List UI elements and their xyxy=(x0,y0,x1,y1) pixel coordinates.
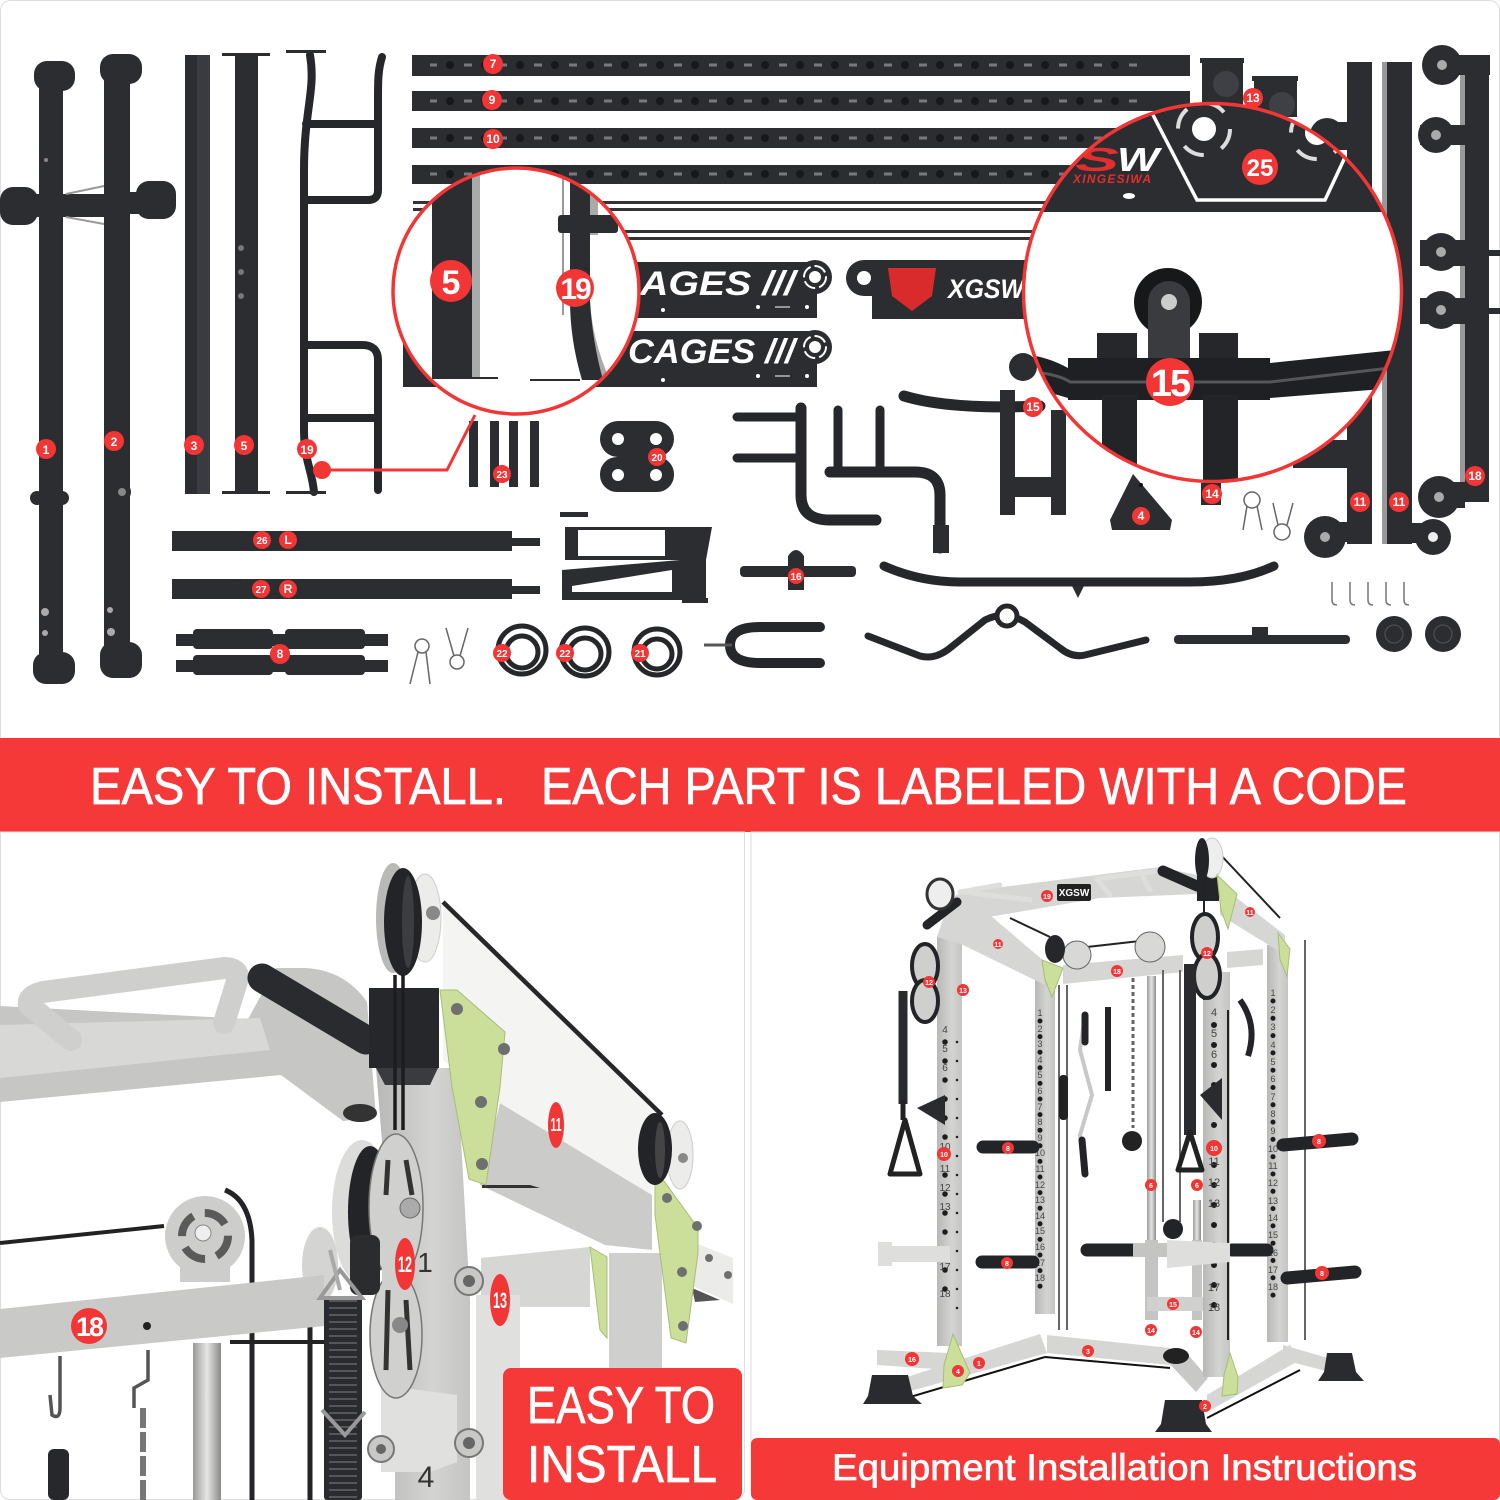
tricep rope xyxy=(704,627,820,663)
green gusset plates xyxy=(440,990,732,1343)
numbered hole rows: 13 xyxy=(1268,1196,1278,1206)
numbered hole rows: 14 xyxy=(1268,1213,1278,1223)
front uprights xyxy=(937,937,1230,1377)
front uprights: 5 xyxy=(942,1044,948,1055)
parts 26 and 27: arms: L xyxy=(284,533,292,547)
double pulley xyxy=(332,1134,423,1398)
part 13 tag: 13 xyxy=(493,1288,507,1313)
numbered hole rows: 14 xyxy=(1035,1211,1045,1221)
long numbered beams 7, 9, 10 xyxy=(412,54,1190,184)
numbered hole rows: 4 xyxy=(1037,1055,1043,1065)
red number tags: 13 xyxy=(959,988,967,995)
diagonal brace, part 11: 11 xyxy=(550,1115,562,1135)
hanging attachments xyxy=(1059,978,1142,1174)
part 4: triangle plate: 4 xyxy=(1138,509,1145,523)
black grip xyxy=(262,978,366,1040)
red number tags: 14 xyxy=(1192,1330,1200,1337)
cross bar with plates xyxy=(0,181,176,225)
top plate 25 xyxy=(1044,105,1382,212)
center rods and lat bar part 15 xyxy=(1087,976,1203,1320)
front uprights: 5 xyxy=(1211,1028,1217,1040)
numbered hole rows: 1 xyxy=(1270,988,1276,998)
front uprights: 13 xyxy=(939,1202,951,1213)
numbered hole rows: 12 xyxy=(1268,1178,1278,1188)
parts 22, 22, 21: cables: 21 xyxy=(634,649,646,660)
red number tags: 8 xyxy=(1006,1146,1010,1153)
panel: close-up of pulley corner xyxy=(0,832,744,1500)
top plate 25: XINGESIWA xyxy=(1072,172,1151,186)
part 15: lat frame: 15 xyxy=(1026,400,1040,414)
red number tags: 11 xyxy=(994,942,1002,949)
part 12 tag: 12 xyxy=(398,1252,412,1277)
numbered hole rows: 16 xyxy=(1035,1242,1045,1252)
numbered hole rows: 8 xyxy=(1037,1117,1043,1127)
numbered hole rows: 6 xyxy=(1037,1086,1043,1096)
base xyxy=(863,1334,1364,1432)
top frame: XGSW xyxy=(1059,888,1090,899)
part 16: short bar xyxy=(740,550,856,590)
long numbered beams 7, 9, 10: 10 xyxy=(486,132,500,146)
red number tags: 12 xyxy=(925,980,933,987)
numbered hole rows: 11 xyxy=(1035,1164,1045,1174)
plate with lion logo: XGSW xyxy=(946,274,1026,304)
curl bar xyxy=(868,606,1146,657)
part 14 xyxy=(1201,483,1222,505)
part 8: sleeves: 8 xyxy=(277,647,284,661)
red number tags: 8 xyxy=(1005,1261,1009,1268)
top frame xyxy=(927,851,1285,985)
red number tags: 10 xyxy=(1210,1146,1218,1153)
numbered hole rows: 12 xyxy=(1035,1180,1045,1190)
front uprights: 11 xyxy=(940,1164,951,1175)
magnifier: parts 5 and 19 xyxy=(393,165,639,414)
red number tags: 8 xyxy=(1320,1271,1324,1278)
front uprights: 4 xyxy=(1211,1007,1217,1019)
lat bar with pulley, part 15 xyxy=(1030,268,1395,485)
rear frame and cross bar 18 xyxy=(1010,918,1288,1342)
plate with lion logo xyxy=(846,260,1030,319)
numbered hole rows: 10 xyxy=(1268,1144,1278,1154)
top plate 25: S xyxy=(1075,141,1119,178)
part 12 tag: 1 xyxy=(417,1247,433,1278)
numbered hole rows: 16 xyxy=(1268,1248,1278,1258)
numbered hole rows: 5 xyxy=(1270,1057,1276,1067)
numbered hole rows: 4 xyxy=(1270,1040,1276,1050)
front uprights: 12 xyxy=(1208,1177,1220,1189)
top pulleys xyxy=(927,838,1223,1000)
magnifier: parts 25 and 15: 25 xyxy=(1247,155,1273,182)
numbered hole rows: 2 xyxy=(1270,1005,1276,1015)
numbered hole rows: 3 xyxy=(1037,1039,1043,1049)
numbered hole rows: 8 xyxy=(1270,1109,1276,1119)
part 19: ladder frame: 19 xyxy=(300,443,314,457)
banner: easy to install: EACH PART IS LABELED WITH A CODE xyxy=(541,758,1407,816)
magnifier: parts 25 and 15: 15 xyxy=(1151,363,1191,405)
front uprights: 17 xyxy=(1208,1282,1220,1294)
part 19: ladder frame xyxy=(286,50,382,494)
red number tags: 14 xyxy=(1147,1328,1155,1335)
parts 26 and 27: arms: R xyxy=(284,582,293,596)
parts 26 and 27: arms: 26 xyxy=(256,536,268,547)
front uprights: 12 xyxy=(939,1183,951,1194)
red number tags: 3 xyxy=(1086,1349,1090,1356)
numbered hole rows: 9 xyxy=(1037,1133,1043,1143)
numbered hole rows: 7 xyxy=(1037,1102,1043,1112)
part 4: triangle plate xyxy=(1110,474,1172,530)
red number tags: 10 xyxy=(940,1152,948,1159)
branded plates: CAGES /// xyxy=(628,333,799,371)
crossbar, part 18 xyxy=(0,1275,324,1358)
numbered hole rows: 9 xyxy=(1270,1126,1276,1136)
upright post xyxy=(368,988,520,1500)
sleeves xyxy=(982,1139,1355,1278)
callout: easy to install: EASY TO xyxy=(527,1377,715,1435)
numbered hole rows: 2 xyxy=(1037,1024,1043,1034)
long numbered beams 7, 9, 10: 9 xyxy=(489,93,496,107)
crossbar cables and middle pulley xyxy=(0,1190,338,1500)
red number tags: 2 xyxy=(1203,1404,1207,1411)
front uprights: 4 xyxy=(942,1025,948,1036)
rear horizontal and second upright xyxy=(481,1230,733,1500)
red number tags: 8 xyxy=(1317,1139,1321,1146)
J-cup arms xyxy=(878,1240,1230,1268)
part 20: linked plates: 20 xyxy=(651,453,663,464)
parts 22, 22, 21: cables xyxy=(493,626,680,676)
red number tags: 19 xyxy=(1043,894,1051,901)
red number tags: 15 xyxy=(1169,1302,1177,1309)
safety brackets xyxy=(560,512,712,603)
foam rolls xyxy=(1376,616,1461,652)
hanging hook, chain and rod xyxy=(48,1343,221,1500)
numbered hole rows xyxy=(1035,940,1305,1340)
callout: easy to install: INSTALL xyxy=(527,1436,717,1494)
numbered hole rows: 15 xyxy=(1035,1226,1045,1236)
numbered hole rows: 6 xyxy=(1270,1074,1276,1084)
diagonal brace, part 11 xyxy=(443,902,662,1250)
part 5: beam: 5 xyxy=(241,439,248,453)
part 2: upright post: 2 xyxy=(111,435,118,449)
front uprights: 11 xyxy=(1208,1156,1220,1168)
parts 26 and 27: arms: 27 xyxy=(255,585,267,596)
part 15: lat frame xyxy=(904,353,1066,515)
part 8: sleeves xyxy=(176,629,388,675)
curved top tube xyxy=(0,968,377,1122)
banner: easy to install xyxy=(0,738,1500,832)
J hooks and handles xyxy=(737,408,949,553)
magnifier: parts 5 and 19: 19 xyxy=(560,273,591,306)
top pulley and cable xyxy=(376,863,662,1130)
side double pulleys, straps and handles xyxy=(890,914,1252,1174)
red number tags: 12 xyxy=(1203,951,1211,958)
numbered hole rows: 15 xyxy=(1268,1230,1278,1240)
right posts 11 and 18: 11 xyxy=(1393,495,1406,509)
numbered hole rows: 3 xyxy=(1270,1022,1276,1032)
right posts 11 and 18 xyxy=(1293,45,1500,558)
spring clips xyxy=(410,628,468,684)
right posts 11 and 18: 11 xyxy=(1354,495,1367,509)
numbered hole rows: 17 xyxy=(1035,1258,1045,1268)
long curved bar xyxy=(884,566,1274,598)
magnifier: parts 5 and 19: 5 xyxy=(442,264,460,302)
numbered hole rows: 7 xyxy=(1270,1092,1276,1102)
magnifier: parts 25 and 15 xyxy=(1020,100,1410,485)
right posts 11 and 18: 18 xyxy=(1468,469,1482,483)
part 23: sleeves: 23 xyxy=(496,470,508,481)
hooks xyxy=(1332,582,1409,605)
panel: assembled power rack xyxy=(751,832,1500,1500)
long numbered beams 7, 9, 10: 7 xyxy=(490,57,497,71)
numbered hole rows: 13 xyxy=(1035,1195,1045,1205)
part 5: beam xyxy=(222,53,270,494)
part 20: linked plates xyxy=(600,421,674,492)
pull-up handle xyxy=(29,968,238,1040)
part 16: short bar: 16 xyxy=(790,572,802,583)
parts 22, 22, 21: cables: 22 xyxy=(496,649,508,660)
part 13 tag xyxy=(490,1274,510,1326)
red number tags: 16 xyxy=(908,1357,916,1364)
branded plates xyxy=(403,260,832,387)
part 1: upright post: 1 xyxy=(43,443,50,457)
front uprights: 17 xyxy=(939,1262,951,1273)
numbered hole rows: 10 xyxy=(1035,1148,1045,1158)
numbered hole rows: 1 xyxy=(1037,1008,1043,1018)
right pulley xyxy=(638,1113,693,1189)
part 23: sleeves xyxy=(469,421,539,487)
crossbar, part 18: 18 xyxy=(76,1312,104,1342)
front uprights: 10 xyxy=(939,1142,951,1153)
part 14: 14 xyxy=(1205,487,1219,501)
part 1: upright post xyxy=(30,61,75,684)
red number tags xyxy=(905,890,1329,1412)
branded plates: AGES /// xyxy=(639,265,799,303)
red number tags: 4 xyxy=(956,1369,960,1376)
panel: parts layout xyxy=(0,0,1500,760)
numbered hole rows: 17 xyxy=(1268,1265,1278,1275)
front uprights: 18 xyxy=(939,1289,951,1300)
connector line xyxy=(313,415,475,479)
red number tags: 6 xyxy=(1149,1183,1153,1190)
part 3: beam xyxy=(184,55,210,494)
strap xyxy=(320,1250,365,1500)
part 13: pulley brackets: 13 xyxy=(1246,91,1260,105)
guide rods xyxy=(413,201,1053,240)
spring clips xyxy=(1243,492,1293,540)
part 13: pulley brackets xyxy=(1200,58,1298,118)
part 12 tag: 4 xyxy=(418,1461,434,1494)
numbered hole rows: 5 xyxy=(1037,1070,1043,1080)
red number tags: 1 xyxy=(977,1361,981,1368)
front uprights: 18 xyxy=(1208,1302,1220,1314)
part 12 tag xyxy=(395,1238,434,1494)
front uprights: 13 xyxy=(1208,1198,1220,1210)
green gussets xyxy=(943,875,1290,1396)
front uprights: 6 xyxy=(1211,1049,1217,1061)
part 2: upright post xyxy=(100,54,142,678)
part 3: beam: 3 xyxy=(191,439,198,453)
red number tags: 18 xyxy=(1113,969,1121,976)
red number tags: 11 xyxy=(1246,910,1254,917)
straight handle xyxy=(1174,627,1350,644)
red number tags: 6 xyxy=(1195,1183,1199,1190)
top plate 25: W xyxy=(1117,141,1163,178)
banner: installation instructions: Equipment Installation Instructions xyxy=(832,1447,1417,1488)
parts 22, 22, 21: cables: 22 xyxy=(559,649,571,660)
numbered hole rows: 18 xyxy=(1268,1282,1278,1292)
banner: easy to install: EASY TO INSTALL. xyxy=(90,758,506,816)
numbered hole rows: 18 xyxy=(1035,1273,1045,1283)
parts 26 and 27: arms xyxy=(172,531,540,599)
callout: easy to install xyxy=(503,1368,742,1500)
numbered hole rows: 11 xyxy=(1268,1161,1278,1171)
banner: installation instructions xyxy=(751,1438,1500,1500)
front uprights: 6 xyxy=(942,1063,948,1074)
